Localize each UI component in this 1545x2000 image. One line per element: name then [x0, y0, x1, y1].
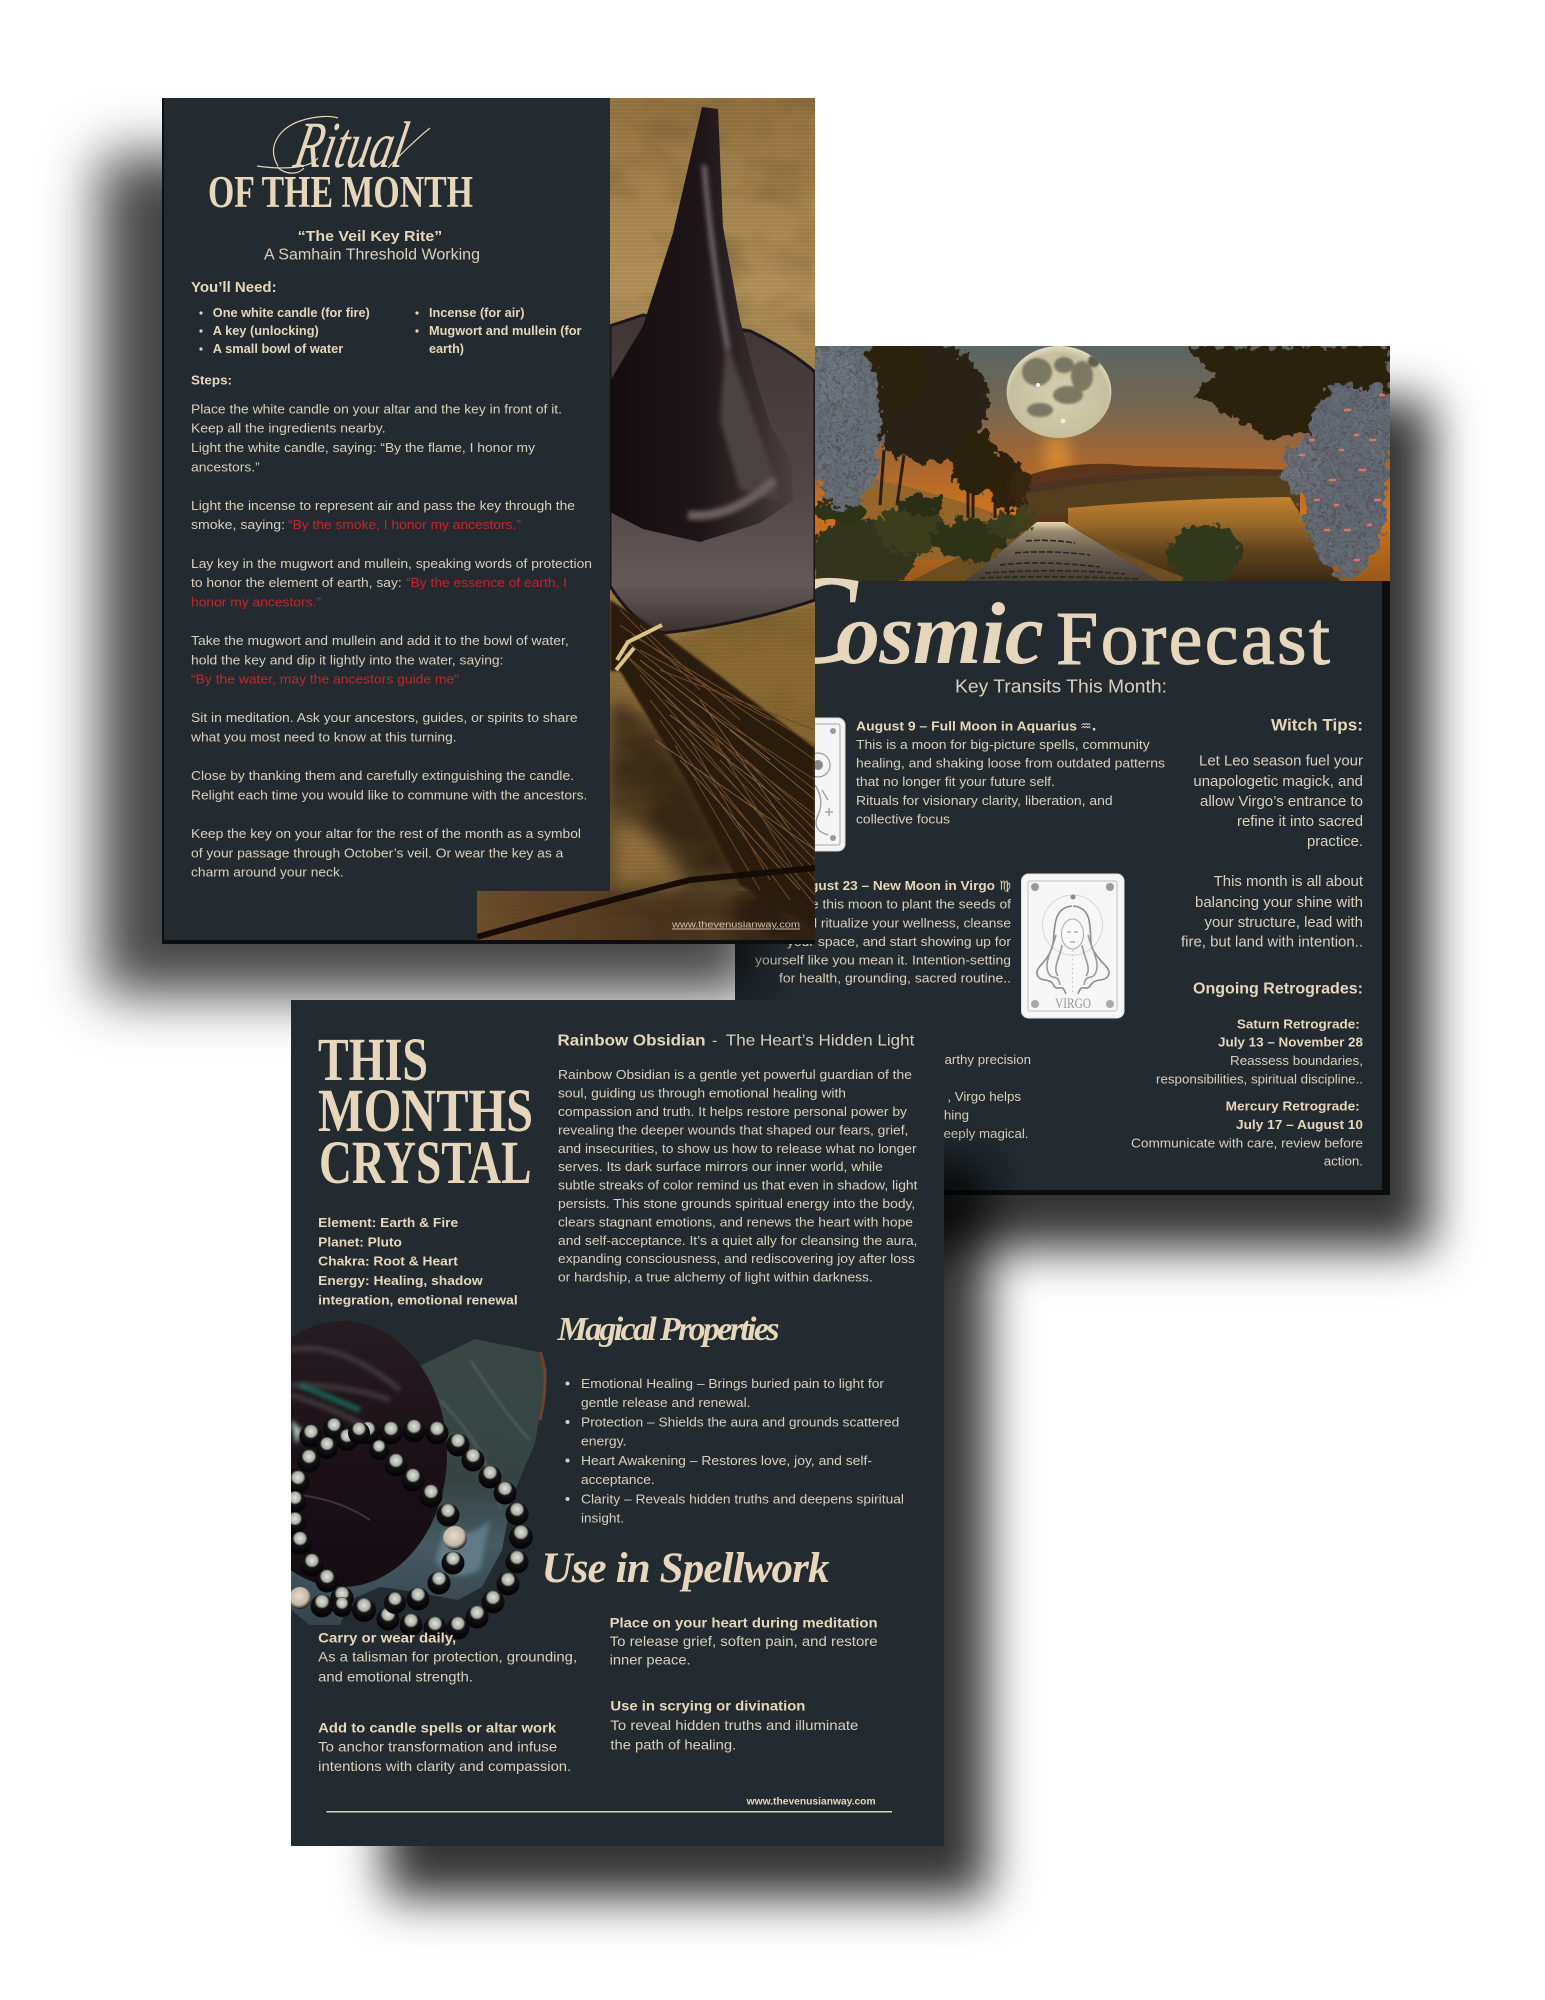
crystal attributes: Planet: Pluto — [318, 1234, 402, 1250]
crystal description: revealing the deeper wounds that shaped our fears, grief, — [558, 1122, 908, 1137]
steps: charm around your neck. — [191, 865, 344, 880]
crystal attributes: integration, emotional renewal — [318, 1292, 518, 1307]
crystal title: - — [712, 1032, 717, 1050]
heading: This Months Crystal: MONTHS — [318, 1078, 533, 1145]
rite title: A Samhain Threshold Working — [264, 246, 480, 264]
shadow: cosmic forecast panel — [780, 400, 1431, 1249]
crystal description: subtle streaks of color remind us that even in shadow, light — [558, 1178, 918, 1193]
heading: This Months Crystal: THIS — [318, 1027, 428, 1094]
heading: Magical Properties: Magical Properties — [556, 1311, 780, 1348]
shadow: crystal panel — [385, 1160, 988, 1898]
witch tips: unapologetic magick, and — [1193, 774, 1363, 790]
website link: www.thevenusianway.com — [671, 920, 800, 930]
heading: Ritual of the Month — [208, 110, 473, 217]
steps: Light the incense to represent air and pass the key through the — [191, 498, 575, 513]
photo: full moon over harvest road — [815, 346, 1390, 581]
crystal title: Rainbow Obsidian — [558, 1032, 706, 1050]
spellwork: candle spells — [318, 1719, 571, 1774]
ongoing retrogrades: Mercury Retrograde: — [1226, 1099, 1360, 1114]
witch tips: This month is all about — [1214, 874, 1363, 890]
subheading: key transits: Key Transits This Month: — [955, 676, 1167, 696]
transit: full moon in Aquarius: ♒. — [1080, 720, 1097, 734]
supplies list: earth) — [429, 342, 464, 356]
panel: cosmic forecast — [735, 340, 1431, 1249]
rite title: “The Veil Key Rite” — [298, 229, 442, 245]
spellwork: meditation — [610, 1614, 878, 1668]
witch tips: allow Virgo’s entrance to — [1200, 794, 1363, 810]
ongoing retrogrades: Communicate with care, review before — [1131, 1136, 1363, 1151]
crystal description: and insecurities, to show us how to release what no longer — [558, 1141, 917, 1156]
steps: to honor the element of earth, say: — [191, 575, 402, 590]
steps: hold the key and dip it lightly into the water, saying: — [191, 652, 504, 667]
ongoing retrogrades: July 17 – August 10 — [1236, 1117, 1363, 1132]
steps: Keep all the ingredients nearby. — [191, 421, 386, 436]
steps: Sit in meditation. Ask your ancestors, guides, or spirits to share — [191, 710, 578, 725]
steps: Close by thanking them and carefully extinguishing the candle. — [191, 768, 574, 783]
spellwork: candle spells: To anchor transformation and infuse — [318, 1738, 557, 1754]
spellwork: carry or wear: As a talisman for protection, grounding, — [318, 1648, 577, 1664]
supplies list: One white candle (for fire) — [213, 306, 370, 320]
witch tips — [1181, 716, 1363, 951]
website footer: www.thevenusianway.com — [746, 1796, 876, 1808]
steps: Relight each time you would like to commune with the ancestors. — [191, 787, 587, 802]
spellwork: scrying: To reveal hidden truths and illuminate — [610, 1717, 859, 1733]
supplies list — [191, 280, 582, 356]
steps: of your passage through October’s veil. Or wear the key as a — [191, 845, 564, 860]
steps: “By the smoke, I honor my ancestors.” — [288, 517, 521, 532]
transit: partly covered paragraph — [936, 1052, 1031, 1141]
panel: ritual of the month — [100, 90, 820, 995]
crystal title — [558, 1032, 915, 1050]
supplies list: Incense (for air) — [429, 306, 524, 320]
transit: partly covered paragraph: earthy precision — [937, 1052, 1031, 1067]
steps — [190, 372, 592, 880]
witch tips: Let Leo season fuel your — [1199, 753, 1363, 769]
transit: full moon in Aquarius: This is a moon for big-picture spells, community — [856, 737, 1150, 752]
spellwork: meditation: To release grief, soften pain, and restore — [610, 1633, 878, 1649]
steps: smoke, saying: — [191, 517, 285, 532]
steps: honor my ancestors.” — [191, 594, 321, 609]
witch tips: balancing your shine with — [1195, 895, 1363, 911]
heading: Ritual of the Month: OF THE MONTH — [208, 167, 473, 217]
transit: full moon in Aquarius: that no longer fit your future self. — [856, 774, 1055, 789]
spellwork: candle spells: intentions with clarity and compassion. — [318, 1758, 571, 1774]
magical properties list: Clarity – Reveals hidden truths and deepens spiritual — [581, 1492, 904, 1506]
steps: what you most need to know at this turning. — [190, 730, 457, 744]
crystal attributes: Element: Earth & Fire — [318, 1215, 458, 1230]
heading: This Months Crystal: CRYSTAL — [319, 1130, 532, 1197]
spellwork: candle spells: Add to candle spells or altar work — [318, 1719, 556, 1735]
crystal description: clears stagnant emotions, and renews the heart with hope — [558, 1214, 913, 1229]
steps: Steps: — [191, 372, 232, 388]
magical properties list: acceptance. — [581, 1472, 655, 1487]
ongoing retrogrades: Ongoing Retrogrades: — [1193, 980, 1363, 998]
crystal description — [558, 1067, 918, 1285]
ongoing retrogrades: Reassess boundaries, — [1230, 1053, 1363, 1068]
ongoing retrogrades: responsibilities, spiritual discipline.. — [1156, 1072, 1363, 1087]
crystal description: or hardship, a true alchemy of light within darkness. — [558, 1270, 873, 1285]
shadow: ritual panel — [100, 155, 755, 995]
supplies list: Mugwort and mullein (for — [429, 324, 582, 338]
ongoing retrogrades — [1131, 980, 1363, 1169]
crystal description: persists. This stone grounds spiritual energy into the body, — [558, 1196, 915, 1211]
transit: new moon in Virgo: yourself like you mean it. Intention-setting — [755, 952, 1011, 968]
crystal title: The Heart’s Hidden Light — [726, 1032, 915, 1050]
crystal description: Rainbow Obsidian is a gentle yet powerful guardian of the — [558, 1067, 912, 1082]
transit: full moon in Aquarius: August 9 – Full Moon in Aquarius — [856, 718, 1077, 734]
transit: new moon in Virgo: ♍ — [999, 879, 1011, 894]
spellwork: scrying: the path of healing. — [610, 1736, 736, 1752]
crystal description: expanding consciousness, and rediscovering joy after loss — [558, 1251, 915, 1266]
steps: Place the white candle on your altar and the key in front of it. — [191, 401, 562, 416]
magical properties list: energy. — [581, 1434, 626, 1449]
transit: new moon in Virgo — [755, 878, 1012, 986]
photo: witch hat and broom on burlap — [477, 90, 820, 950]
tarot card: Virgo: VIRGO — [1055, 996, 1091, 1012]
supplies list: You’ll Need: — [191, 280, 277, 296]
transit: new moon in Virgo: and ritualize your wellness, cleanse — [794, 916, 1011, 930]
steps: “By the water, may the ancestors guide me” — [191, 672, 459, 687]
crystal attributes: Energy: Healing, shadow — [318, 1273, 483, 1288]
heading: Ritual of the Month: Ritual — [288, 110, 414, 182]
transit: partly covered paragraph: , Virgo helps — [947, 1089, 1021, 1104]
steps: Light the white candle, saying: “By the flame, I honor my — [191, 440, 535, 455]
transit: new moon in Virgo: your space, and start showing up for — [787, 934, 1012, 949]
rite title — [264, 229, 480, 264]
ongoing retrogrades: action. — [1324, 1154, 1363, 1169]
spellwork: meditation: inner peace. — [610, 1652, 691, 1668]
panel background: ritual — [162, 98, 815, 944]
crystal description: and self-acceptance. It’s a quiet ally for cleansing the aura, — [558, 1233, 918, 1248]
transit: full moon in Aquarius: Rituals for visionary clarity, liberation, and — [856, 793, 1113, 808]
spellwork: meditation: Place on your heart during meditation — [610, 1614, 878, 1630]
spellwork: scrying: Use in scrying or divination — [610, 1698, 805, 1714]
magical properties list: insight. — [581, 1510, 624, 1526]
steps: Lay key in the mugwort and mullein, speaking words of protection — [191, 556, 592, 571]
crystal description: serves. Its dark surface mirrors our inner world, while — [558, 1159, 883, 1174]
steps: Keep the key on your altar for the rest of the month as a symbol — [191, 826, 581, 841]
heading: Cosmic Forecast: C — [772, 549, 859, 691]
ongoing retrogrades: Saturn Retrograde: — [1237, 1016, 1360, 1032]
supplies list: A small bowl of water — [213, 342, 343, 356]
magical properties list: gentle release and renewal. — [581, 1395, 750, 1410]
heading: Cosmic Forecast: osmic — [836, 586, 1043, 683]
transit: full moon in Aquarius: collective focus — [856, 811, 950, 826]
spellwork: scrying — [610, 1698, 859, 1752]
steps: ancestors.” — [191, 459, 260, 474]
crystal description: soul, guiding us through emotional healing with — [558, 1086, 846, 1101]
witch tips: practice. — [1307, 834, 1363, 850]
heading: Use in Spellwork: Use in Spellwork — [542, 1545, 830, 1592]
magical properties list: Heart Awakening – Restores love, joy, and self- — [581, 1453, 872, 1468]
transit: full moon in Aquarius: healing, and shaking loose from outdated patterns — [856, 756, 1165, 771]
crystal attributes: Chakra: Root & Heart — [318, 1254, 458, 1268]
tarot card: Virgo — [1022, 874, 1124, 1018]
spellwork: carry or wear: Carry or wear daily, — [318, 1630, 456, 1646]
transit: full moon in Aquarius — [856, 718, 1165, 826]
magical properties list: Protection – Shields the aura and grounds scattered — [581, 1414, 899, 1430]
witch tips: fire, but land with intention.. — [1181, 935, 1363, 951]
heading: Cosmic Forecast: Forecast — [1056, 597, 1330, 681]
transit: partly covered paragraph: deeply magical. — [936, 1126, 1028, 1141]
transit: partly covered paragraph: thing — [940, 1108, 969, 1123]
witch tips: Witch Tips: — [1271, 716, 1363, 734]
panel: this months crystal — [237, 1000, 988, 1898]
steps: “By the essence of earth, I — [406, 575, 567, 590]
witch tips: your structure, lead with — [1204, 915, 1363, 931]
supplies list: A key (unlocking) — [213, 324, 319, 338]
panel background: cosmic forecast — [735, 346, 1390, 1195]
witch tips: refine it into sacred — [1237, 814, 1363, 830]
transit: new moon in Virgo: for health, grounding, sacred routine.. — [779, 970, 1011, 986]
tarot card: Aquarius — [751, 718, 845, 851]
bead bracelet — [284, 1418, 533, 1640]
magical properties list: Emotional Healing – Brings buried pain to light for — [581, 1376, 885, 1391]
crystal description: compassion and truth. It helps restore personal power by — [558, 1104, 907, 1119]
panel background: crystal — [291, 1000, 944, 1846]
transit: new moon in Virgo: Use this moon to plant the seeds of — [794, 896, 1011, 912]
heading: Cosmic Forecast — [772, 549, 1330, 691]
transit: new moon in Virgo: August 23 – New Moon in Virgo — [792, 878, 995, 893]
heading: This Months Crystal — [318, 1027, 533, 1197]
spellwork: carry or wear: and emotional strength. — [318, 1668, 473, 1684]
crystal attributes — [318, 1215, 518, 1307]
spellwork: carry or wear — [318, 1630, 577, 1684]
photo: rainbow obsidian and bead bracelet — [291, 1321, 547, 1640]
steps: Take the mugwort and mullein and add it to the bowl of water, — [191, 633, 569, 648]
ongoing retrogrades: July 13 – November 28 — [1218, 1035, 1363, 1050]
magical properties list — [566, 1376, 904, 1526]
